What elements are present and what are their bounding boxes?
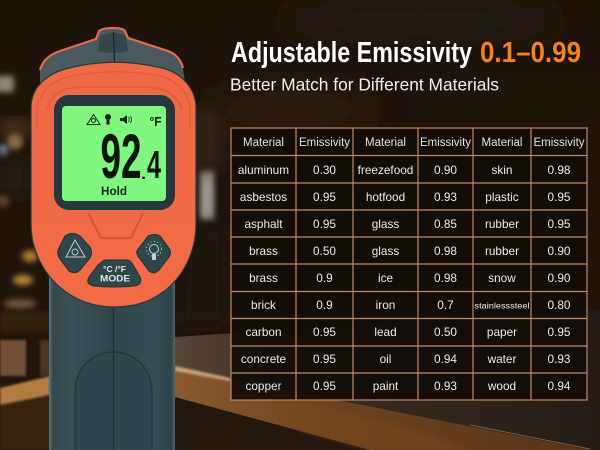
orange body: [31, 62, 196, 307]
header row: Emissivity: [533, 137, 585, 149]
button: mode: °C /°F: [103, 264, 126, 274]
data rows: 0.50: [434, 325, 457, 339]
right wooden slab edge: [175, 368, 590, 450]
button: backlight: [137, 234, 170, 273]
data rows: asphalt: [244, 217, 283, 231]
data rows: 0.50: [313, 244, 336, 258]
data rows: 0.9: [316, 298, 333, 312]
icon: laser triangle: [87, 114, 100, 124]
title: 0.1–0.99: [480, 37, 581, 69]
table text: [238, 137, 585, 393]
button: mode: [88, 260, 141, 287]
emissivity table: [231, 128, 587, 400]
LCD display: [62, 106, 166, 201]
header row: [243, 137, 585, 149]
data rows: ice: [378, 271, 393, 285]
header row: Emissivity: [299, 137, 350, 149]
header row: Emissivity: [420, 137, 471, 149]
right wooden slab top: [175, 310, 600, 450]
data rows: hotfood: [366, 190, 405, 204]
temperature reading: 92: [100, 122, 142, 192]
data rows: 0.95: [548, 217, 571, 231]
data rows: 0.93: [548, 352, 571, 366]
data rows: oil: [380, 352, 391, 366]
table background: [231, 128, 587, 400]
data rows: stainlesssteel: [474, 300, 530, 310]
data rows: 0.9: [316, 271, 333, 285]
data rows: glass: [372, 217, 399, 231]
data rows: concrete: [241, 352, 287, 366]
data rows: 0.95: [313, 325, 336, 339]
data rows: asbestos: [240, 190, 287, 204]
data rows: freezefood: [358, 163, 413, 177]
data rows: 0.90: [548, 271, 571, 285]
data rows: wood: [487, 379, 516, 393]
data rows: paint: [373, 379, 399, 393]
header row: Material: [243, 137, 284, 149]
temperature reading: 4: [147, 144, 161, 187]
data rows: 0.93: [434, 379, 457, 393]
screen bezel: [54, 95, 175, 210]
data rows: 0.95: [313, 190, 336, 204]
data rows: 0.30: [313, 163, 336, 177]
data rows: rubber: [485, 217, 519, 231]
unit: °F: [150, 115, 162, 129]
title: Adjustable Emissivity: [231, 37, 472, 69]
data rows: 0.90: [548, 244, 571, 258]
hold label: Hold: [101, 186, 127, 198]
subtitle: Better Match for Different Materials: [230, 74, 499, 94]
grip: [49, 270, 175, 450]
left wooden table: [0, 395, 50, 450]
data rows: 0.93: [434, 190, 457, 204]
data rows: aluminum: [238, 163, 289, 177]
table grid: [231, 128, 587, 400]
data rows: brass: [249, 244, 278, 258]
data rows: 0.80: [548, 298, 571, 312]
data rows: 0.94: [548, 379, 571, 393]
data rows: plastic: [485, 190, 519, 204]
data rows: rubber: [485, 244, 519, 258]
icon: speaker: [120, 115, 132, 124]
data rows: copper: [245, 379, 282, 393]
temperature reading: .: [141, 166, 146, 183]
data rows: skin: [492, 163, 512, 177]
data rows: 0.95: [313, 217, 336, 231]
header row: Material: [365, 137, 406, 149]
data rows: brass: [249, 271, 278, 285]
data rows: paper: [487, 325, 517, 339]
data rows: iron: [376, 298, 395, 312]
data rows: 0.90: [434, 163, 457, 177]
data rows: 0.95: [313, 352, 336, 366]
data rows: water: [487, 352, 516, 366]
screen notch: [88, 213, 143, 238]
icon: lamp: [105, 114, 111, 124]
header row: Material: [482, 137, 522, 149]
data rows: brick: [251, 298, 276, 312]
data rows: lead: [374, 325, 397, 339]
data rows: 0.95: [548, 190, 571, 204]
data rows: [238, 163, 571, 393]
data rows: 0.98: [548, 163, 571, 177]
data rows: 0.7: [437, 298, 454, 312]
data rows: 0.85: [434, 217, 457, 231]
button: laser: [58, 234, 92, 273]
data rows: 0.98: [434, 271, 457, 285]
button: mode: MODE: [100, 274, 130, 284]
data rows: 0.98: [434, 244, 457, 258]
top sensor hood: [40, 28, 186, 90]
data rows: 0.95: [548, 325, 571, 339]
data rows: 0.95: [313, 379, 336, 393]
data rows: snow: [488, 271, 516, 285]
infrared thermometer: [31, 28, 196, 450]
data rows: 0.94: [434, 352, 457, 366]
data rows: carbon: [245, 325, 282, 339]
data rows: glass: [372, 244, 399, 258]
